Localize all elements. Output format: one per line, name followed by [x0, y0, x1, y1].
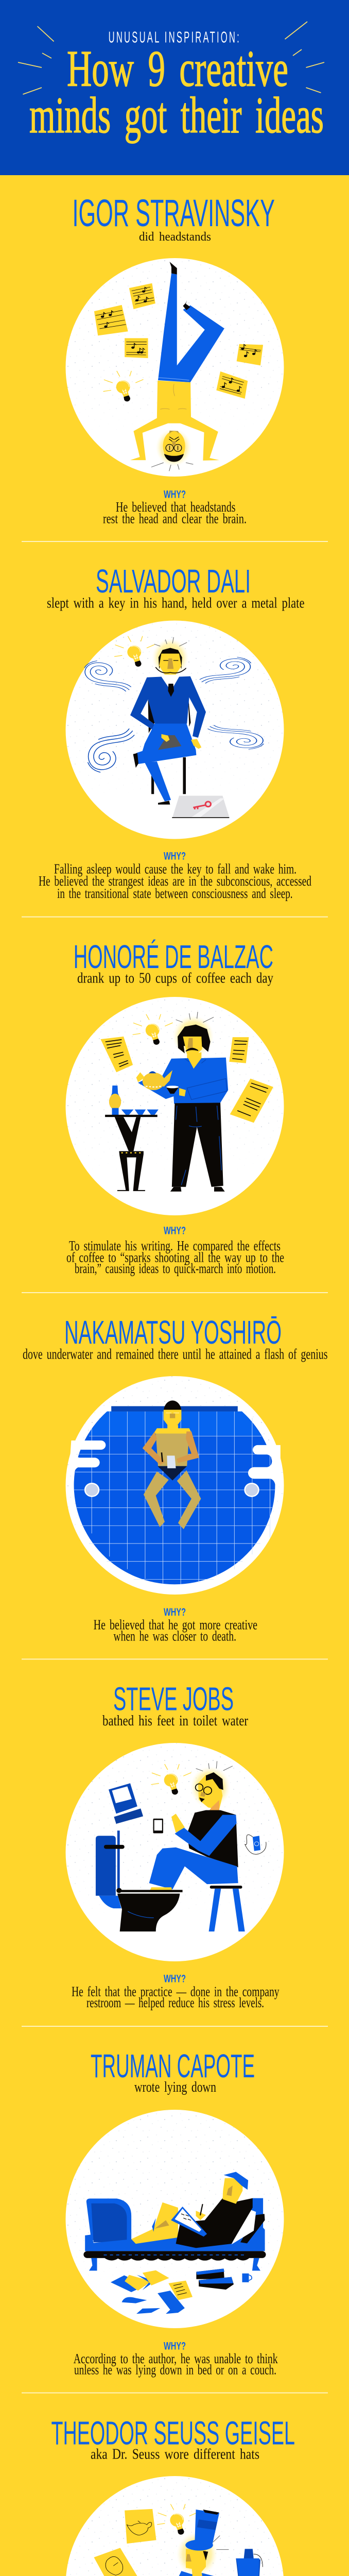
scattered papers — [111, 2270, 193, 2314]
explanation — [72, 1984, 280, 2010]
why label: WHY? — [164, 2340, 186, 2352]
panel: Salvador Dali — [39, 563, 311, 901]
trousers — [158, 274, 224, 382]
icon: lightbulb — [133, 1014, 172, 1046]
toilet bowl — [116, 1888, 183, 1931]
torso and arms — [130, 381, 219, 461]
explanation: According to the author, he was unable to think — [74, 2351, 278, 2366]
impact rays — [151, 463, 193, 471]
explanation — [39, 861, 311, 901]
glow and rays — [177, 2532, 217, 2576]
tile grid — [74, 1412, 275, 1584]
why label: WHY? — [164, 1973, 186, 1985]
illustration: Balzac pouring coffee — [100, 1012, 273, 1192]
side table — [105, 1115, 158, 1191]
sofa — [83, 2198, 266, 2270]
coffee cups — [121, 1109, 159, 1115]
panel: Theodor Seuss Geisel — [51, 2414, 295, 2576]
glow and rays — [173, 1015, 214, 1058]
black cushion and pillow — [240, 2214, 265, 2243]
metal plate with key — [172, 796, 229, 818]
panel: Truman Capote — [66, 2047, 284, 2378]
explanation: He felt that the practice — done in the company — [72, 1984, 280, 1999]
name heading: STEVE JOBS — [113, 1681, 234, 1718]
illustration disc — [66, 2476, 284, 2576]
stack of hats — [213, 2549, 265, 2576]
burst rays around title — [18, 22, 324, 94]
pool lights — [85, 1483, 258, 1497]
robe — [176, 2198, 253, 2248]
shirt — [138, 1058, 228, 1104]
illustration: Seuss with hats — [91, 2504, 265, 2576]
why label: WHY? — [164, 1606, 186, 1618]
explanation — [103, 499, 247, 527]
oil lamp — [109, 1086, 121, 1115]
habit subtitle: drank up to 50 cups of coffee each day — [77, 971, 273, 987]
icon: lightbulb — [151, 1765, 191, 1797]
glow behind head — [156, 429, 191, 466]
eyebrow title: UNUSUAL INSPIRATION: — [109, 28, 241, 46]
illustration disc — [66, 620, 284, 839]
illustration: Stravinsky doing a headstand — [94, 262, 263, 471]
shoes — [133, 753, 170, 805]
trousers and shoes — [172, 1103, 223, 1187]
top hat — [185, 2510, 219, 2551]
stool — [209, 1886, 245, 1931]
glow and rays — [190, 1767, 231, 1808]
toilet tank and pipe — [96, 1831, 125, 1908]
coffee cup and hand — [166, 1086, 186, 1096]
explanation: restroom — helped reduce his stress levels. — [86, 1995, 264, 2010]
explanation — [74, 2351, 278, 2378]
trousers — [149, 1848, 238, 1889]
white cloud cutouts — [69, 1440, 281, 1485]
illustration: Dali on a chair — [84, 636, 264, 818]
panel: Igor Stravinsky — [66, 192, 284, 527]
name heading: SALVADOR DALI — [96, 563, 251, 600]
why label: WHY? — [164, 488, 186, 501]
habit subtitle: bathed his feet in toilet water — [102, 1713, 249, 1729]
smartphone — [153, 1819, 163, 1833]
explanation: He believed that he got more creative — [94, 1617, 257, 1632]
icon: lightbulb — [103, 371, 143, 403]
manuscript pages — [100, 1037, 273, 1123]
sketch sheets — [91, 2509, 156, 2576]
explanation — [94, 1617, 257, 1643]
icon: lightbulb — [115, 636, 154, 669]
clipboard, hand and pen — [171, 2205, 207, 2236]
swirling clouds — [84, 657, 264, 772]
teapot — [143, 1070, 172, 1090]
panel: Nakamatsu Yoshiro — [23, 1314, 327, 1643]
explanation — [66, 1238, 284, 1276]
pool water — [74, 1412, 275, 1584]
hands — [161, 734, 201, 749]
panel: Honore de Balzac — [66, 938, 284, 1276]
black sweater — [187, 1810, 238, 1868]
legs — [131, 2202, 178, 2244]
glow and rays — [152, 638, 188, 677]
head with hair and moustache — [156, 648, 186, 674]
head, glasses, beard — [163, 431, 185, 462]
sleeve and hand — [174, 1815, 237, 1856]
explanation: rest the head and clear the brain. — [103, 511, 247, 527]
suit jacket — [130, 676, 206, 738]
illustration: man in pool — [69, 1400, 281, 1584]
shirt and tie — [161, 676, 179, 691]
illustration disc — [66, 2110, 284, 2328]
why label: WHY? — [164, 851, 186, 862]
habit subtitle: did headstands — [139, 230, 211, 244]
trousers — [136, 724, 196, 764]
illustration disc — [66, 997, 284, 1215]
computer — [109, 1783, 143, 1824]
illustration disc — [66, 1376, 284, 1595]
illustration: Capote on sofa — [83, 2172, 266, 2314]
shoes — [169, 262, 177, 275]
illustration disc — [66, 1743, 284, 1961]
poolside rim — [111, 1406, 238, 1412]
head and hair — [178, 1025, 211, 1069]
mug — [242, 2274, 252, 2282]
head — [186, 2549, 208, 2576]
body — [169, 2571, 215, 2576]
hand on teapot — [136, 1072, 145, 1082]
music sheets — [94, 283, 263, 399]
head with glasses — [196, 1772, 223, 1810]
habit subtitle: aka Dr. Seuss wore different hats — [91, 2447, 259, 2463]
header banner — [0, 0, 349, 175]
explanation: when he was closer to death. — [113, 1628, 236, 1643]
chair — [148, 695, 191, 794]
swimmer — [143, 1400, 201, 1529]
music player — [245, 1835, 266, 1854]
stacked books — [196, 2268, 234, 2290]
habit subtitle: wrote lying down — [134, 2079, 216, 2095]
explanation: He believed that headstands — [116, 499, 236, 515]
panel: Steve Jobs — [66, 1681, 284, 2010]
icon: lightbulb — [158, 2504, 197, 2536]
illustration: Jobs with feet in toilet — [96, 1761, 266, 1931]
why label: WHY? — [164, 1225, 186, 1236]
illustration disc — [66, 258, 284, 477]
